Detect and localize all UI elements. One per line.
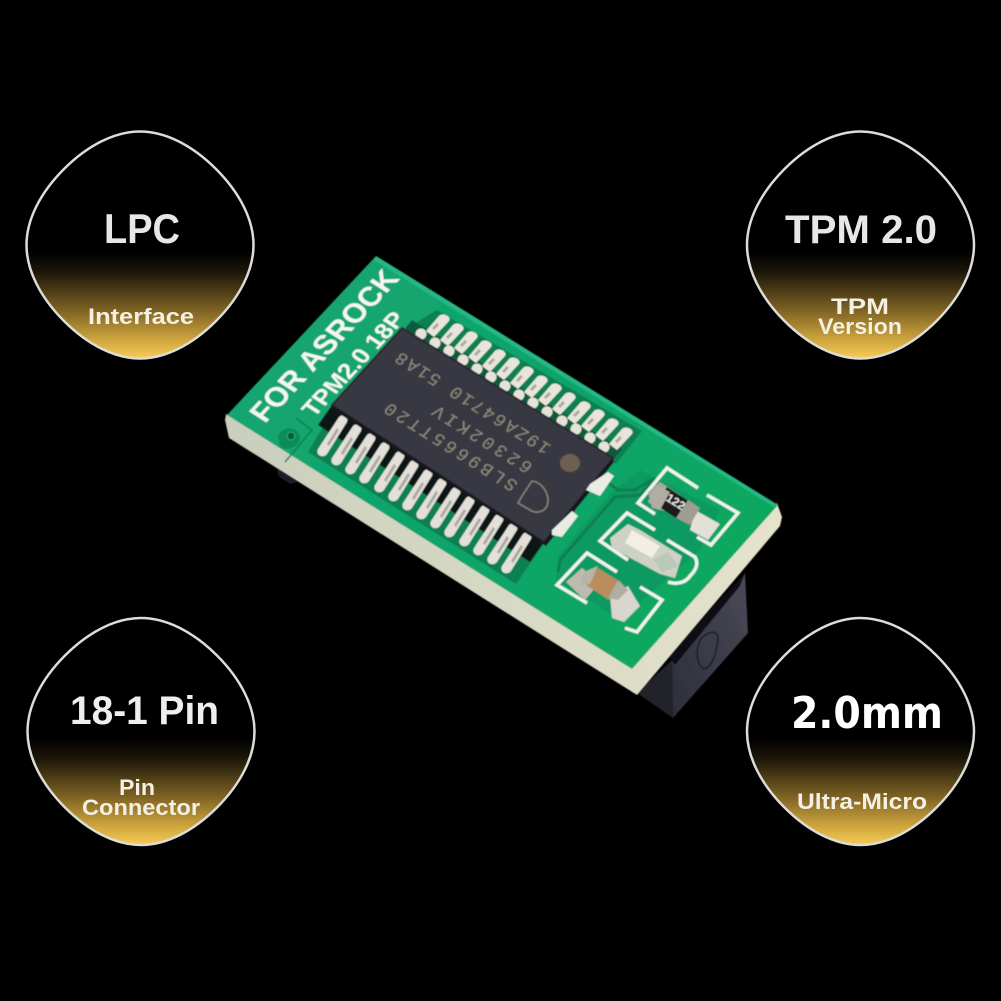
label: Interface: Interface — [88, 304, 194, 329]
top pins — [416, 315, 633, 452]
label: Pin Connector: Connector — [82, 795, 200, 820]
chip logo — [518, 481, 548, 512]
heading: 18-1 Pin: 18-1 Pin — [70, 689, 219, 733]
IC chip — [332, 328, 614, 546]
resistor 122 — [638, 468, 738, 545]
chip side tabs — [552, 472, 614, 537]
board edge — [225, 414, 782, 695]
label: Pin Connector — [82, 775, 200, 820]
dark copper areas — [404, 310, 642, 464]
connector block — [277, 468, 748, 718]
badge: 18-1 Pin Connector — [28, 618, 254, 845]
board top surface — [227, 256, 778, 669]
LED — [600, 513, 697, 583]
heading: TPM 2.0: TPM 2.0 — [785, 208, 937, 252]
chip marking: SLB9665TT20 — [381, 398, 523, 494]
PCB board — [225, 256, 782, 695]
label: TPM Version: Version — [818, 314, 902, 339]
silkscreen: TPM2.0 18P: TPM2.0 18P — [296, 307, 412, 421]
badge: 2.0mm Ultra-Micro — [747, 618, 974, 845]
badge: LPC Interface — [26, 132, 254, 358]
heading: LPC: LPC — [104, 205, 180, 252]
capacitor — [557, 553, 662, 632]
chip marking: 62302KIV — [429, 400, 538, 476]
badge: TPM 2.0 Version — [747, 132, 974, 358]
bottom pins — [317, 415, 531, 573]
silkscreen: FOR ASROCK: FOR ASROCK — [243, 264, 406, 428]
label: Ultra-Micro: Ultra-Micro — [797, 789, 927, 814]
chip marking: 19ZA64710 51A8 — [392, 347, 556, 457]
label: TPM Version — [818, 294, 902, 339]
label: Pin Connector: Pin — [119, 775, 155, 800]
resistor 122: 122 — [663, 491, 688, 513]
label: TPM Version: TPM — [831, 294, 889, 319]
chip pin-1 dot — [560, 454, 580, 472]
heading: 2.0mm: 2.0mm — [791, 688, 943, 739]
